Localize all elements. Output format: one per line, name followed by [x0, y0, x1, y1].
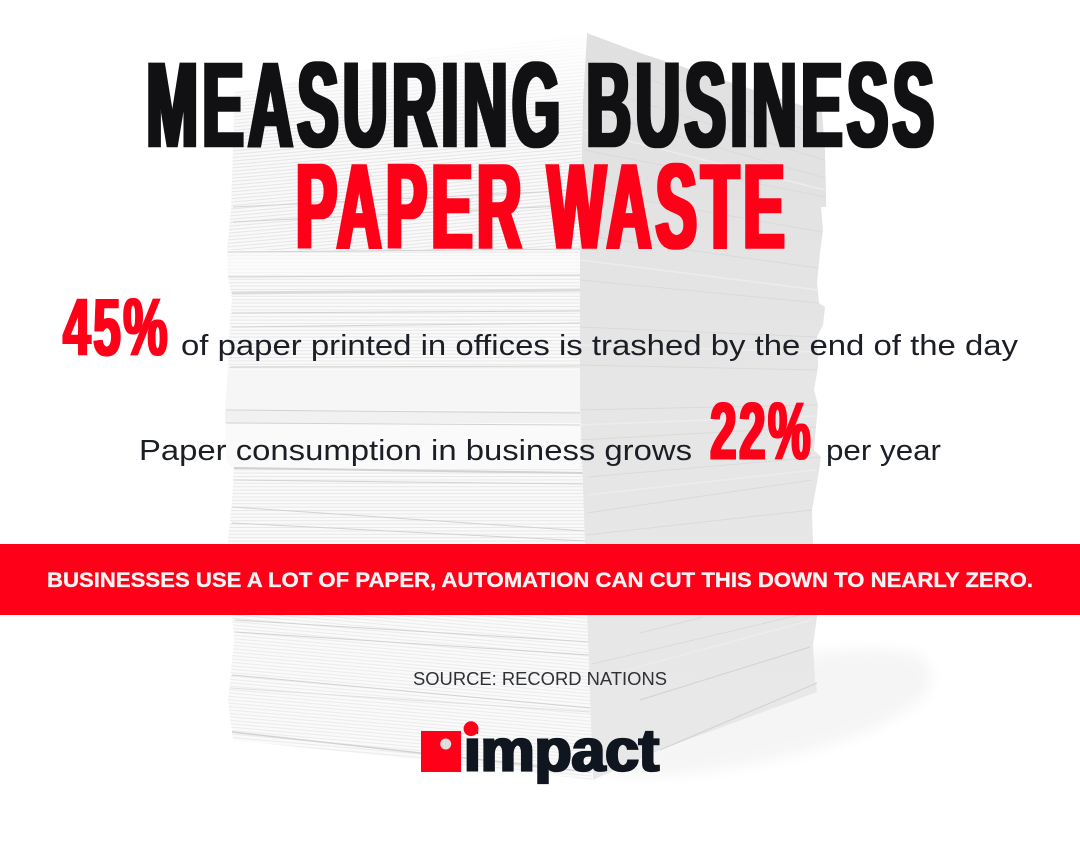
per year label: per year — [826, 435, 941, 467]
title — [146, 36, 938, 274]
stack right face — [577, 33, 826, 780]
22% figure: 22% — [710, 387, 813, 477]
statistic: 45% trashed — [63, 283, 1019, 373]
logo red square — [421, 731, 461, 772]
red banner — [0, 544, 1080, 615]
source note: SOURCE: RECORD NATIONS — [413, 669, 667, 689]
logo wordmark: impact — [464, 717, 659, 784]
stack left face — [220, 30, 592, 785]
paper stack photo — [220, 30, 931, 785]
logo red dot — [464, 721, 478, 736]
growth description: Paper consumption in business grows — [139, 435, 692, 467]
banner text: BUSINESSES USE A LOT OF PAPER, AUTOMATION CAN CUT THIS DOWN TO NEARLY ZERO. — [47, 569, 1033, 592]
stack shadow — [610, 650, 931, 775]
45% description: of paper printed in offices is trashed by the end of the day — [181, 330, 1019, 362]
statistic: 22% growth — [139, 387, 941, 477]
45% figure: 45% — [63, 283, 170, 373]
impact logo — [421, 717, 659, 784]
